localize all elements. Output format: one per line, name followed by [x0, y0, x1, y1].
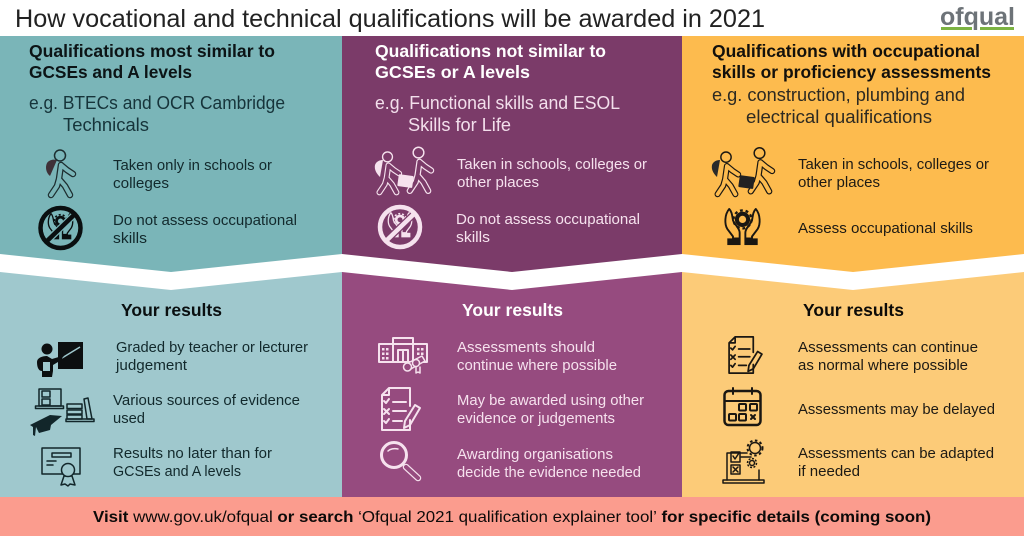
text: taken in schools, colleges or other places: Taken in schools, colleges or — [457, 157, 647, 173]
icon: hands and gear — [725, 209, 760, 245]
text: do not assess occupational skills: Do not assess occupational — [113, 213, 297, 229]
panel: qualifications not similar to GCSEs or A levels — [342, 36, 682, 272]
text: assessments can continue as normal where possible: Assessments can continue — [798, 340, 978, 356]
icon: two people walking — [375, 147, 431, 192]
examples text: e.g. construction, plumbing and — [712, 84, 965, 105]
text: various sources of evidence used: used — [113, 411, 145, 427]
text: do not assess occupational skills: skills — [456, 230, 490, 246]
heading: your results: Your results — [803, 300, 904, 320]
text: various sources of evidence used: Various sources of evidence — [113, 393, 300, 409]
panel: your results, purple — [342, 272, 682, 497]
icon: laptop with gears and checkboxes — [723, 440, 764, 483]
examples text: Skills for Life — [408, 114, 511, 135]
text: graded by teacher or lecturer judgement: judgement — [115, 358, 187, 374]
examples text: e.g. BTECs and OCR Cambridge — [29, 92, 285, 113]
text: assessments may be delayed: Assessments may be delayed — [798, 402, 995, 418]
icon: calendar — [724, 388, 760, 425]
text: do not assess occupational skills: skills — [113, 231, 147, 247]
panel: your results, orange — [682, 272, 1024, 497]
icon: no occupational skills — [40, 208, 80, 248]
text: taken in schools, colleges or other places: other places — [457, 175, 539, 191]
icon: teacher at board — [37, 342, 83, 377]
icon: checklist with pen — [382, 388, 420, 430]
panel: qualifications with occupational skills or proficiency assessments — [682, 36, 1024, 272]
heading: your results: Your results — [462, 300, 563, 320]
text: taken in schools, colleges or other places: Taken in schools, colleges or — [798, 157, 989, 173]
text: may be awarded using other evidence or judgements: evidence or judgements — [457, 411, 615, 427]
text: taken only in schools or colleges: colleges — [113, 176, 169, 192]
text: assessments can continue as normal where possible: as normal where possible — [798, 358, 968, 374]
heading: Qualifications not similar to — [375, 41, 606, 61]
text: results no later than for GCSEs and A levels: GCSEs and A levels — [113, 464, 241, 480]
heading: your results: Your results — [121, 300, 222, 320]
logo: ofqual: ofqual — [940, 3, 1015, 31]
text: assessments should continue where possible: continue where possible — [457, 358, 617, 374]
icon: college building with scroll — [379, 338, 427, 373]
text: graded by teacher or lecturer judgement: Graded by teacher or lecturer — [116, 340, 308, 356]
icon: laptop, books and mortarboard — [30, 389, 94, 436]
panel: qualifications most similar to GCSEs and A levels — [0, 36, 342, 272]
footer banner — [0, 497, 1024, 536]
icon: student walking — [46, 150, 73, 195]
text: assessments should continue where possible: Assessments should — [457, 340, 595, 356]
text: assessments can be adapted if needed: Assessments can be adapted — [798, 446, 994, 462]
text: taken in schools, colleges or other places: other places — [798, 175, 880, 191]
heading: GCSEs and A levels — [29, 62, 192, 82]
text: may be awarded using other evidence or judgements: May be awarded using other — [457, 393, 644, 409]
icon: no occupational skills — [380, 207, 420, 247]
text: results no later than for GCSEs and A levels: Results no later than for — [113, 446, 272, 462]
text: assessments can be adapted if needed: if needed — [798, 464, 860, 480]
text: assess occupational skills: Assess occupational skills — [798, 221, 973, 237]
examples text: Technicals — [63, 114, 149, 135]
text: awarding organisations decide the evidence needed: decide the evidence needed — [457, 465, 641, 481]
heading: skills or proficiency assessments — [712, 62, 991, 82]
text: do not assess occupational skills: Do not assess occupational — [456, 212, 640, 228]
title: How vocational and technical qualifications will be awarded in 2021 — [15, 5, 765, 33]
heading: Qualifications most similar to — [29, 41, 275, 61]
footer text: Visit www.gov.uk/ofqual or search ‘Ofqual 2021 qualification explainer tool’ for specific details (coming soon) — [93, 509, 931, 526]
panel: your results, teal — [0, 272, 342, 497]
heading: Qualifications with occupational — [712, 41, 980, 61]
icon: two people walking — [712, 148, 772, 194]
icon: certificate — [42, 448, 80, 486]
heading: GCSEs or A levels — [375, 62, 530, 82]
icon: checklist with pen — [729, 337, 762, 373]
examples text: e.g. Functional skills and ESOL — [375, 92, 620, 113]
icon: magnifying glass — [382, 442, 418, 478]
text: awarding organisations decide the evidence needed: Awarding organisations — [457, 447, 613, 463]
examples text: electrical qualifications — [746, 106, 932, 127]
text: taken only in schools or colleges: Taken only in schools or — [113, 158, 272, 174]
